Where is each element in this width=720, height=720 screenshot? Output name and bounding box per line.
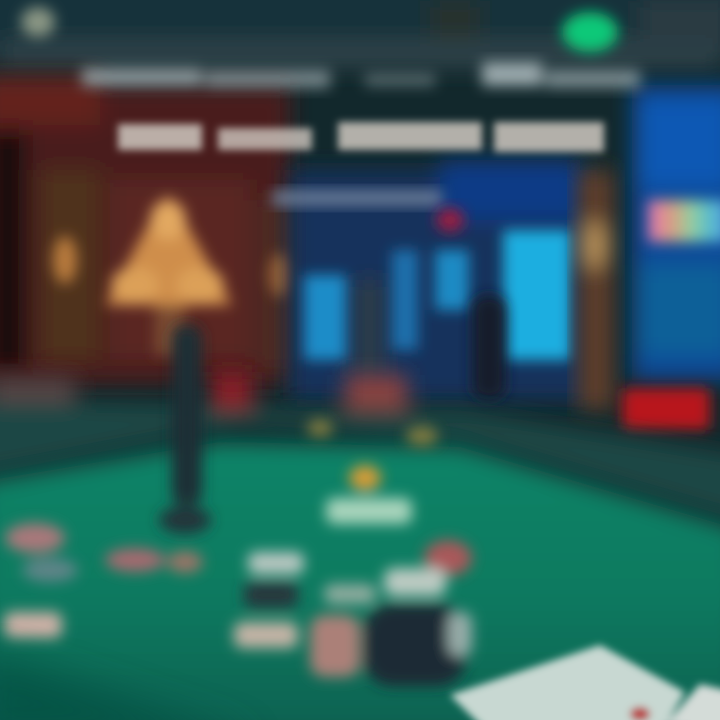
title bar: main white text blur xyxy=(118,122,604,152)
icon: glowing club emblem xyxy=(105,195,232,355)
ceiling lights xyxy=(21,7,618,52)
table felt xyxy=(0,442,720,720)
standing figure silhouette xyxy=(472,295,506,400)
playing cards bottom right xyxy=(450,645,720,720)
title bar: upper white text blur xyxy=(82,62,640,88)
soft vignette on felt xyxy=(0,650,260,720)
front chip stacks xyxy=(234,540,472,686)
blue screen glows xyxy=(304,230,571,360)
colour chart on right screen xyxy=(648,200,720,242)
red marker xyxy=(436,208,464,232)
wooden pillar xyxy=(578,170,614,410)
table rail xyxy=(0,372,720,520)
panel: red wall xyxy=(0,75,295,385)
panel: right blue screen xyxy=(632,85,720,380)
left poker chips xyxy=(4,523,203,638)
ceiling xyxy=(0,0,720,68)
subtitle blur xyxy=(272,190,442,206)
red chair xyxy=(622,388,710,430)
panel: central blue screens xyxy=(290,160,590,400)
wall lamps xyxy=(53,236,291,297)
centre stack of cards xyxy=(326,465,412,524)
dark figure standing xyxy=(159,325,211,534)
brass chips on rail xyxy=(307,419,438,446)
